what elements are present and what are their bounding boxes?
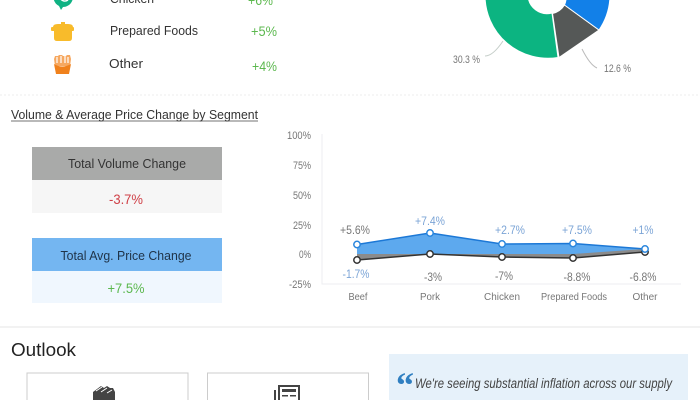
category labels: Other: [632, 291, 658, 303]
icon: pot: [51, 22, 74, 41]
category labels: Chicken: [484, 291, 520, 303]
donut chart: [453, 0, 631, 75]
value: -3.7%: [109, 192, 143, 207]
panel: total average price change: [32, 238, 222, 303]
y axis: [287, 130, 311, 291]
heading: volume and price: Volume & Average Price Change by Segment: [11, 107, 258, 122]
icon: fries: [54, 55, 71, 74]
panel: outlook card one: [27, 373, 188, 400]
y axis: -25%: [289, 279, 311, 291]
heading: outlook: Outlook: [11, 340, 77, 360]
panel: segment list: [51, 0, 277, 74]
header: [32, 238, 222, 271]
upper data labels: [340, 216, 654, 237]
value: other: +4%: [252, 59, 277, 74]
icon: books: [93, 386, 115, 400]
area line chart: [287, 130, 681, 303]
callout: 12.6 %: [582, 49, 631, 75]
lower data labels: -6.8%: [630, 272, 656, 284]
slice: green: [485, 0, 558, 58]
lower data labels: -8.8%: [564, 272, 590, 284]
blue area: [357, 233, 645, 254]
header text: Total Volume Change: [68, 156, 186, 171]
panel: quote: [389, 354, 688, 400]
label: prepared foods: Prepared Foods: [110, 23, 198, 38]
category labels: Pork: [420, 291, 441, 303]
y axis: 25%: [293, 220, 311, 232]
upper data labels: +7.5%: [562, 225, 592, 237]
lower data labels: [342, 269, 656, 284]
callout: 30.3 %: [453, 41, 503, 66]
y axis: 50%: [293, 190, 311, 202]
y axis: 100%: [287, 130, 311, 142]
panel: outlook card two: [208, 373, 368, 400]
value: prepared foods: +5%: [251, 24, 277, 39]
lower data labels: -7%: [495, 271, 513, 283]
price points: [354, 230, 648, 252]
volume line: [357, 252, 645, 260]
category labels: Prepared Foods: [541, 291, 607, 303]
category labels: [348, 291, 658, 303]
label: other: Other: [109, 56, 144, 71]
lower data labels: -1.7%: [342, 269, 370, 281]
slice: blue: [564, 0, 610, 30]
body: [32, 180, 222, 213]
panel: total volume change: [32, 147, 222, 213]
icon: chicken: [53, 0, 73, 10]
gray area: [357, 233, 645, 260]
lower data labels: -3%: [424, 272, 442, 284]
volume points: [354, 249, 648, 263]
value: +7.5%: [108, 281, 144, 296]
y axis: 75%: [293, 160, 311, 172]
header text: Total Avg. Price Change: [60, 248, 192, 263]
callout: 30.3 %: 30.3 %: [453, 54, 480, 66]
price line: [357, 233, 645, 249]
upper data labels: +7.4%: [415, 216, 445, 228]
upper data labels: +2.7%: [495, 225, 525, 237]
category labels: Beef: [348, 291, 368, 303]
slice: gray: [552, 5, 599, 58]
y axis: 0%: [299, 249, 311, 261]
header: [32, 147, 222, 180]
upper data labels: +5.6%: [340, 225, 370, 237]
body: [32, 271, 222, 303]
upper data labels: +1%: [632, 225, 654, 237]
icon: newspaper: [275, 386, 299, 400]
callout: 12.6 %: 12.6 %: [604, 63, 631, 75]
